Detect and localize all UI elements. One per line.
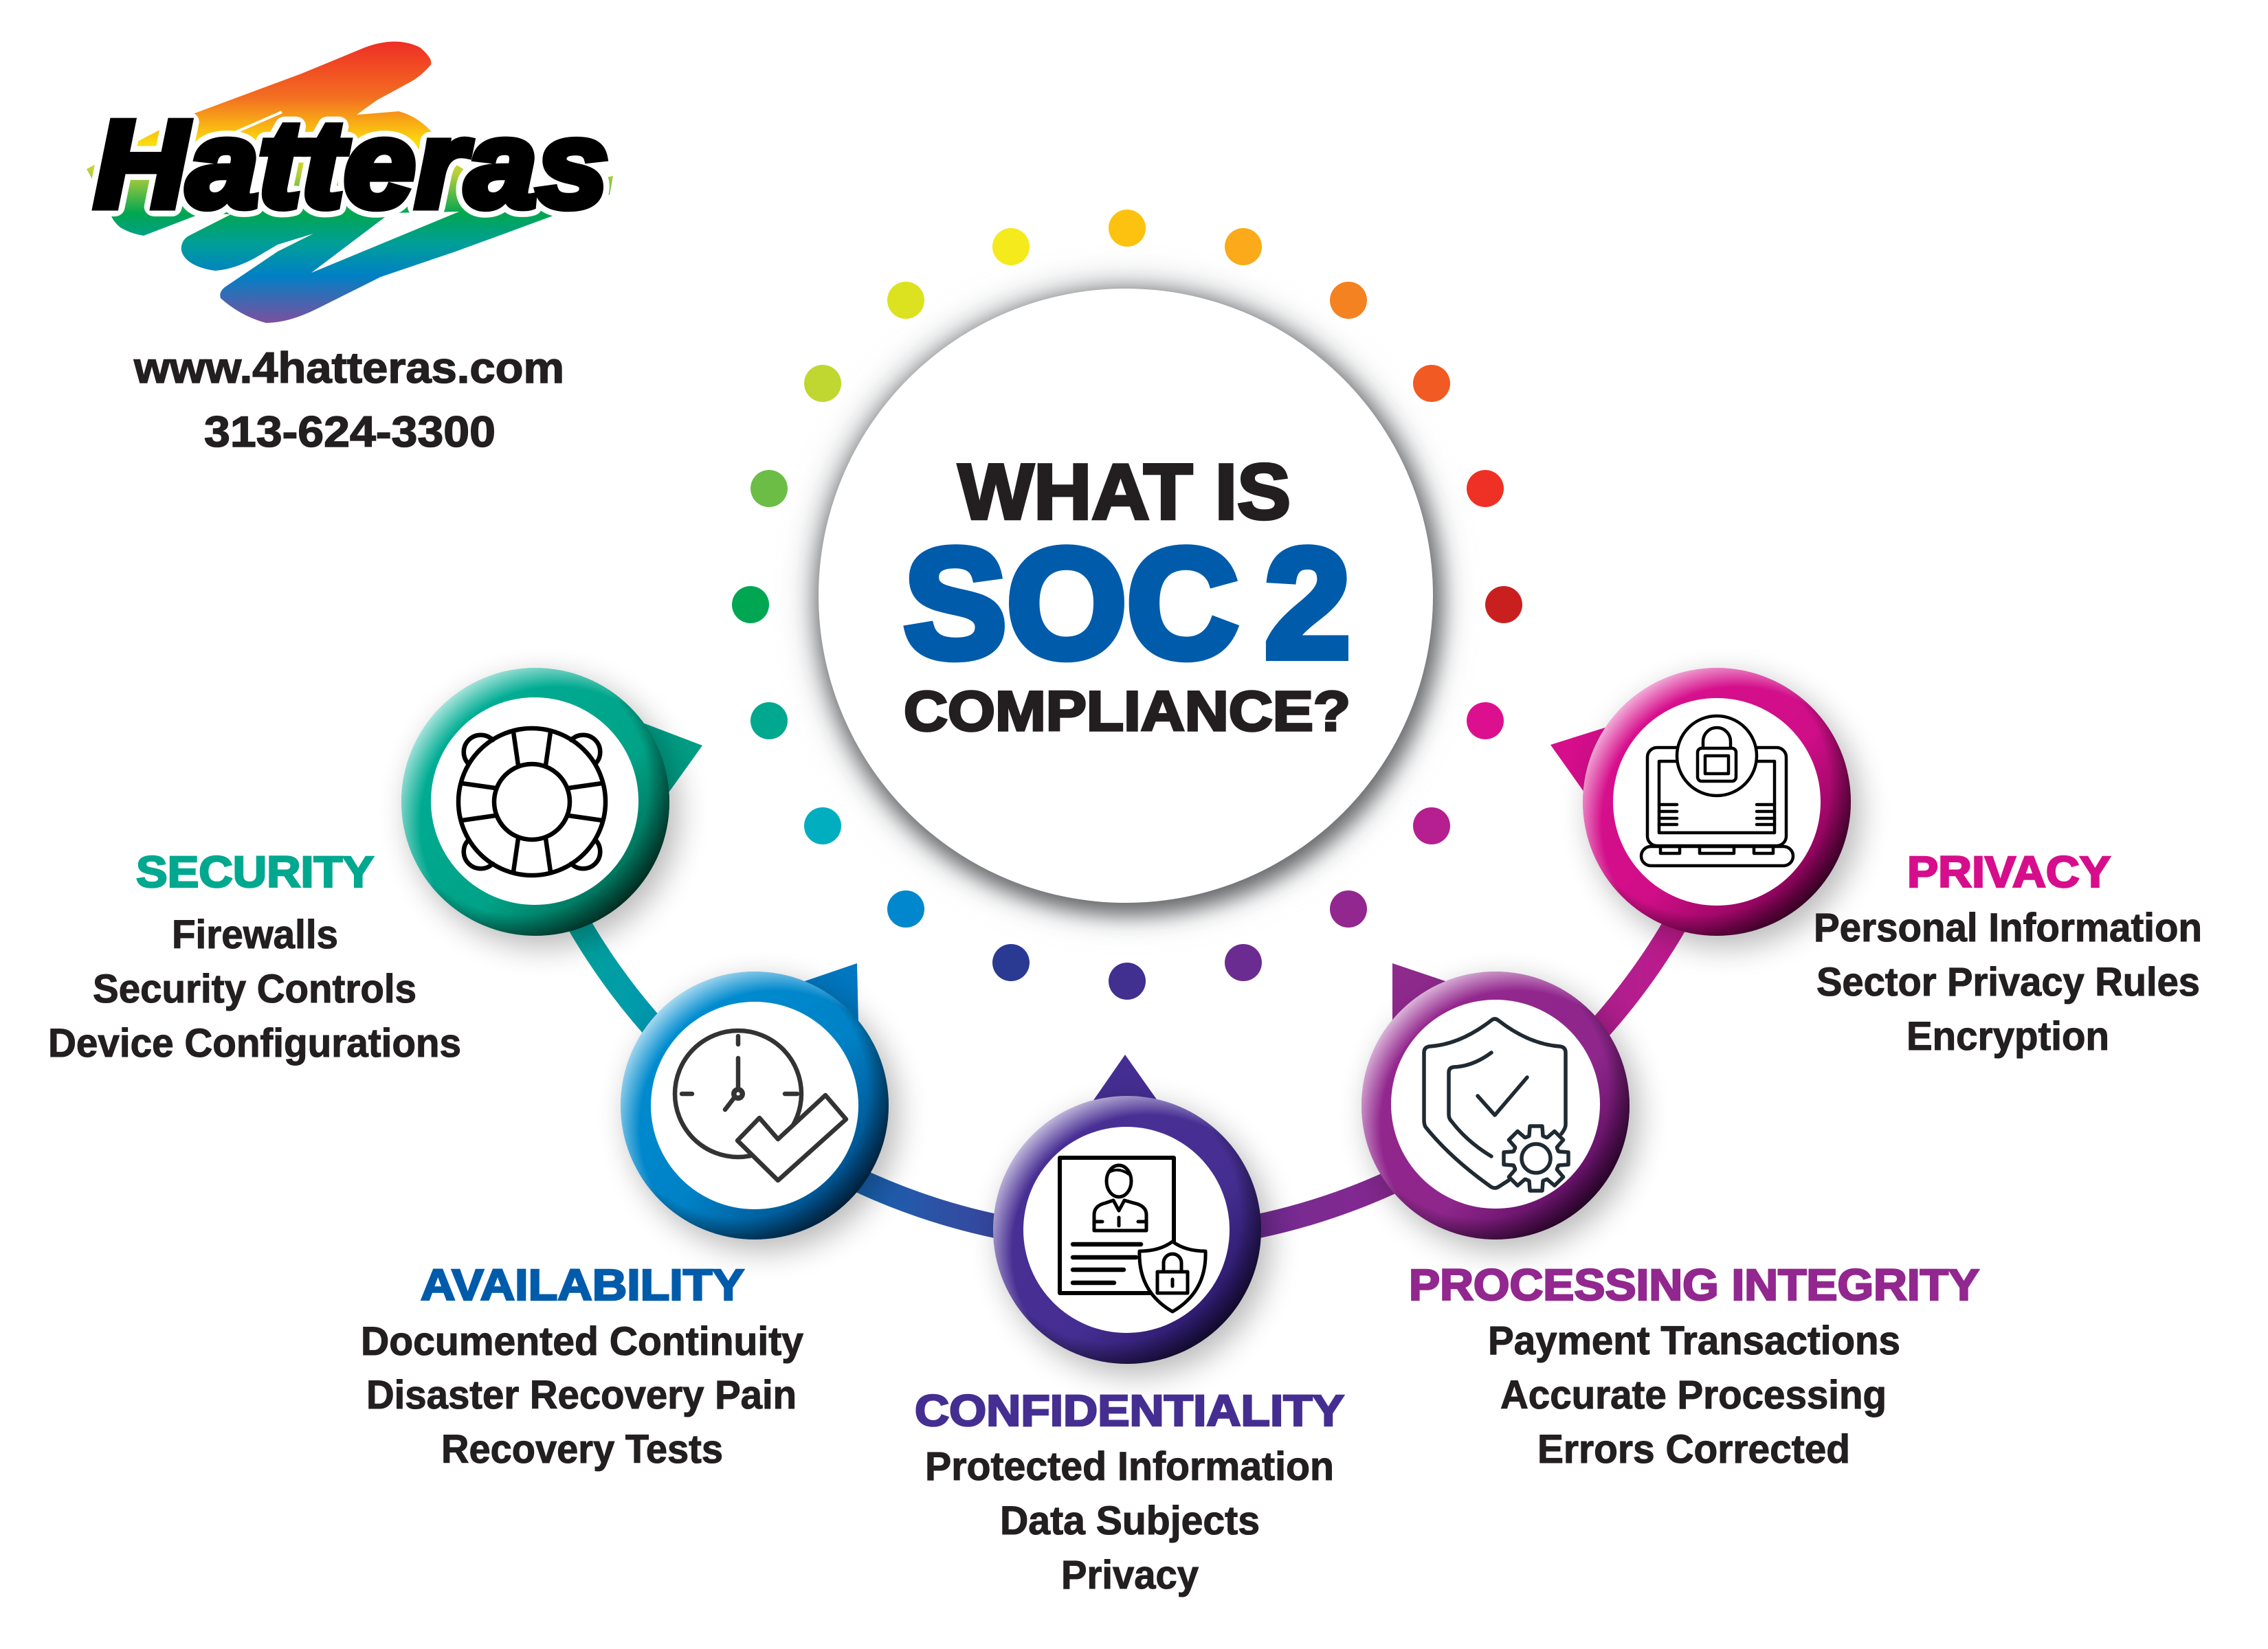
text block: processing integrity: Errors Corrected [1537, 1427, 1850, 1472]
text block: privacy: Encryption [1906, 1014, 2109, 1059]
arrow: confidentiality [1089, 1055, 1161, 1106]
text block: availability [361, 1260, 803, 1472]
connector arc [524, 802, 1730, 1239]
icon: clock with check mark [675, 1031, 846, 1180]
icon: laptop with padlock [1641, 716, 1793, 866]
text block: availability: AVAILABILITY [421, 1260, 744, 1310]
text block: security: Device Configurations [48, 1021, 461, 1066]
badge: security [401, 668, 679, 947]
contact: website: www.4hatteras.com [133, 344, 564, 392]
badge: privacy [1583, 668, 1860, 947]
arrow: security [639, 721, 702, 792]
text block: processing integrity [1409, 1260, 1979, 1472]
badge: processing integrity [1361, 972, 1639, 1251]
text block: processing integrity: PROCESSING INTEGRITY [1409, 1260, 1979, 1310]
badge: availability [621, 972, 898, 1251]
text block: confidentiality: Privacy [1061, 1553, 1199, 1597]
icon: lifebuoy [458, 728, 605, 875]
dots ring [732, 210, 1522, 1000]
logo: Hatteras rainbow swoosh: Hatteras [94, 96, 608, 234]
contact: phone number: 313-624-3300 [204, 408, 496, 456]
text block: privacy: Sector Privacy Rules [1816, 960, 2200, 1005]
text block: confidentiality: Protected Information [925, 1444, 1334, 1489]
icon: document with person and shield [1060, 1158, 1205, 1312]
text block: processing integrity: Accurate Processing [1500, 1373, 1887, 1417]
text block: availability: Disaster Recovery Pain [366, 1373, 797, 1417]
icon: shield with check and gear [1424, 1019, 1568, 1191]
title: SOC 2: SOC 2 [904, 516, 1350, 690]
text block: privacy: PRIVACY [1907, 847, 2111, 897]
logo: Hatteras rainbow swoosh [87, 41, 613, 323]
text block: processing integrity: Payment Transactions [1488, 1319, 1900, 1363]
logo: Hatteras rainbow swoosh: Hatteras [94, 96, 608, 234]
title: COMPLIANCE?: COMPLIANCE? [904, 680, 1350, 743]
text block: availability: Recovery Tests [441, 1427, 723, 1472]
badge: confidentiality [993, 1096, 1271, 1376]
text block: security: Security Controls [93, 967, 416, 1011]
text block: privacy [1814, 847, 2202, 1059]
text block: availability: Documented Continuity [361, 1319, 803, 1364]
text block: confidentiality: Data Subjects [1000, 1499, 1260, 1543]
text block: security [48, 847, 461, 1066]
title: WHAT IS: WHAT IS [958, 449, 1291, 536]
text block: security: SECURITY [136, 847, 374, 897]
text block: security: Firewalls [172, 912, 338, 957]
arrow: availability [801, 963, 858, 1024]
arrow: privacy [1550, 726, 1612, 797]
text block: privacy: Personal Information [1814, 906, 2202, 950]
central circle [808, 280, 1446, 918]
text block: confidentiality [915, 1386, 1344, 1597]
arrow: processing integrity [1392, 963, 1454, 1024]
text block: confidentiality: CONFIDENTIALITY [915, 1386, 1344, 1435]
